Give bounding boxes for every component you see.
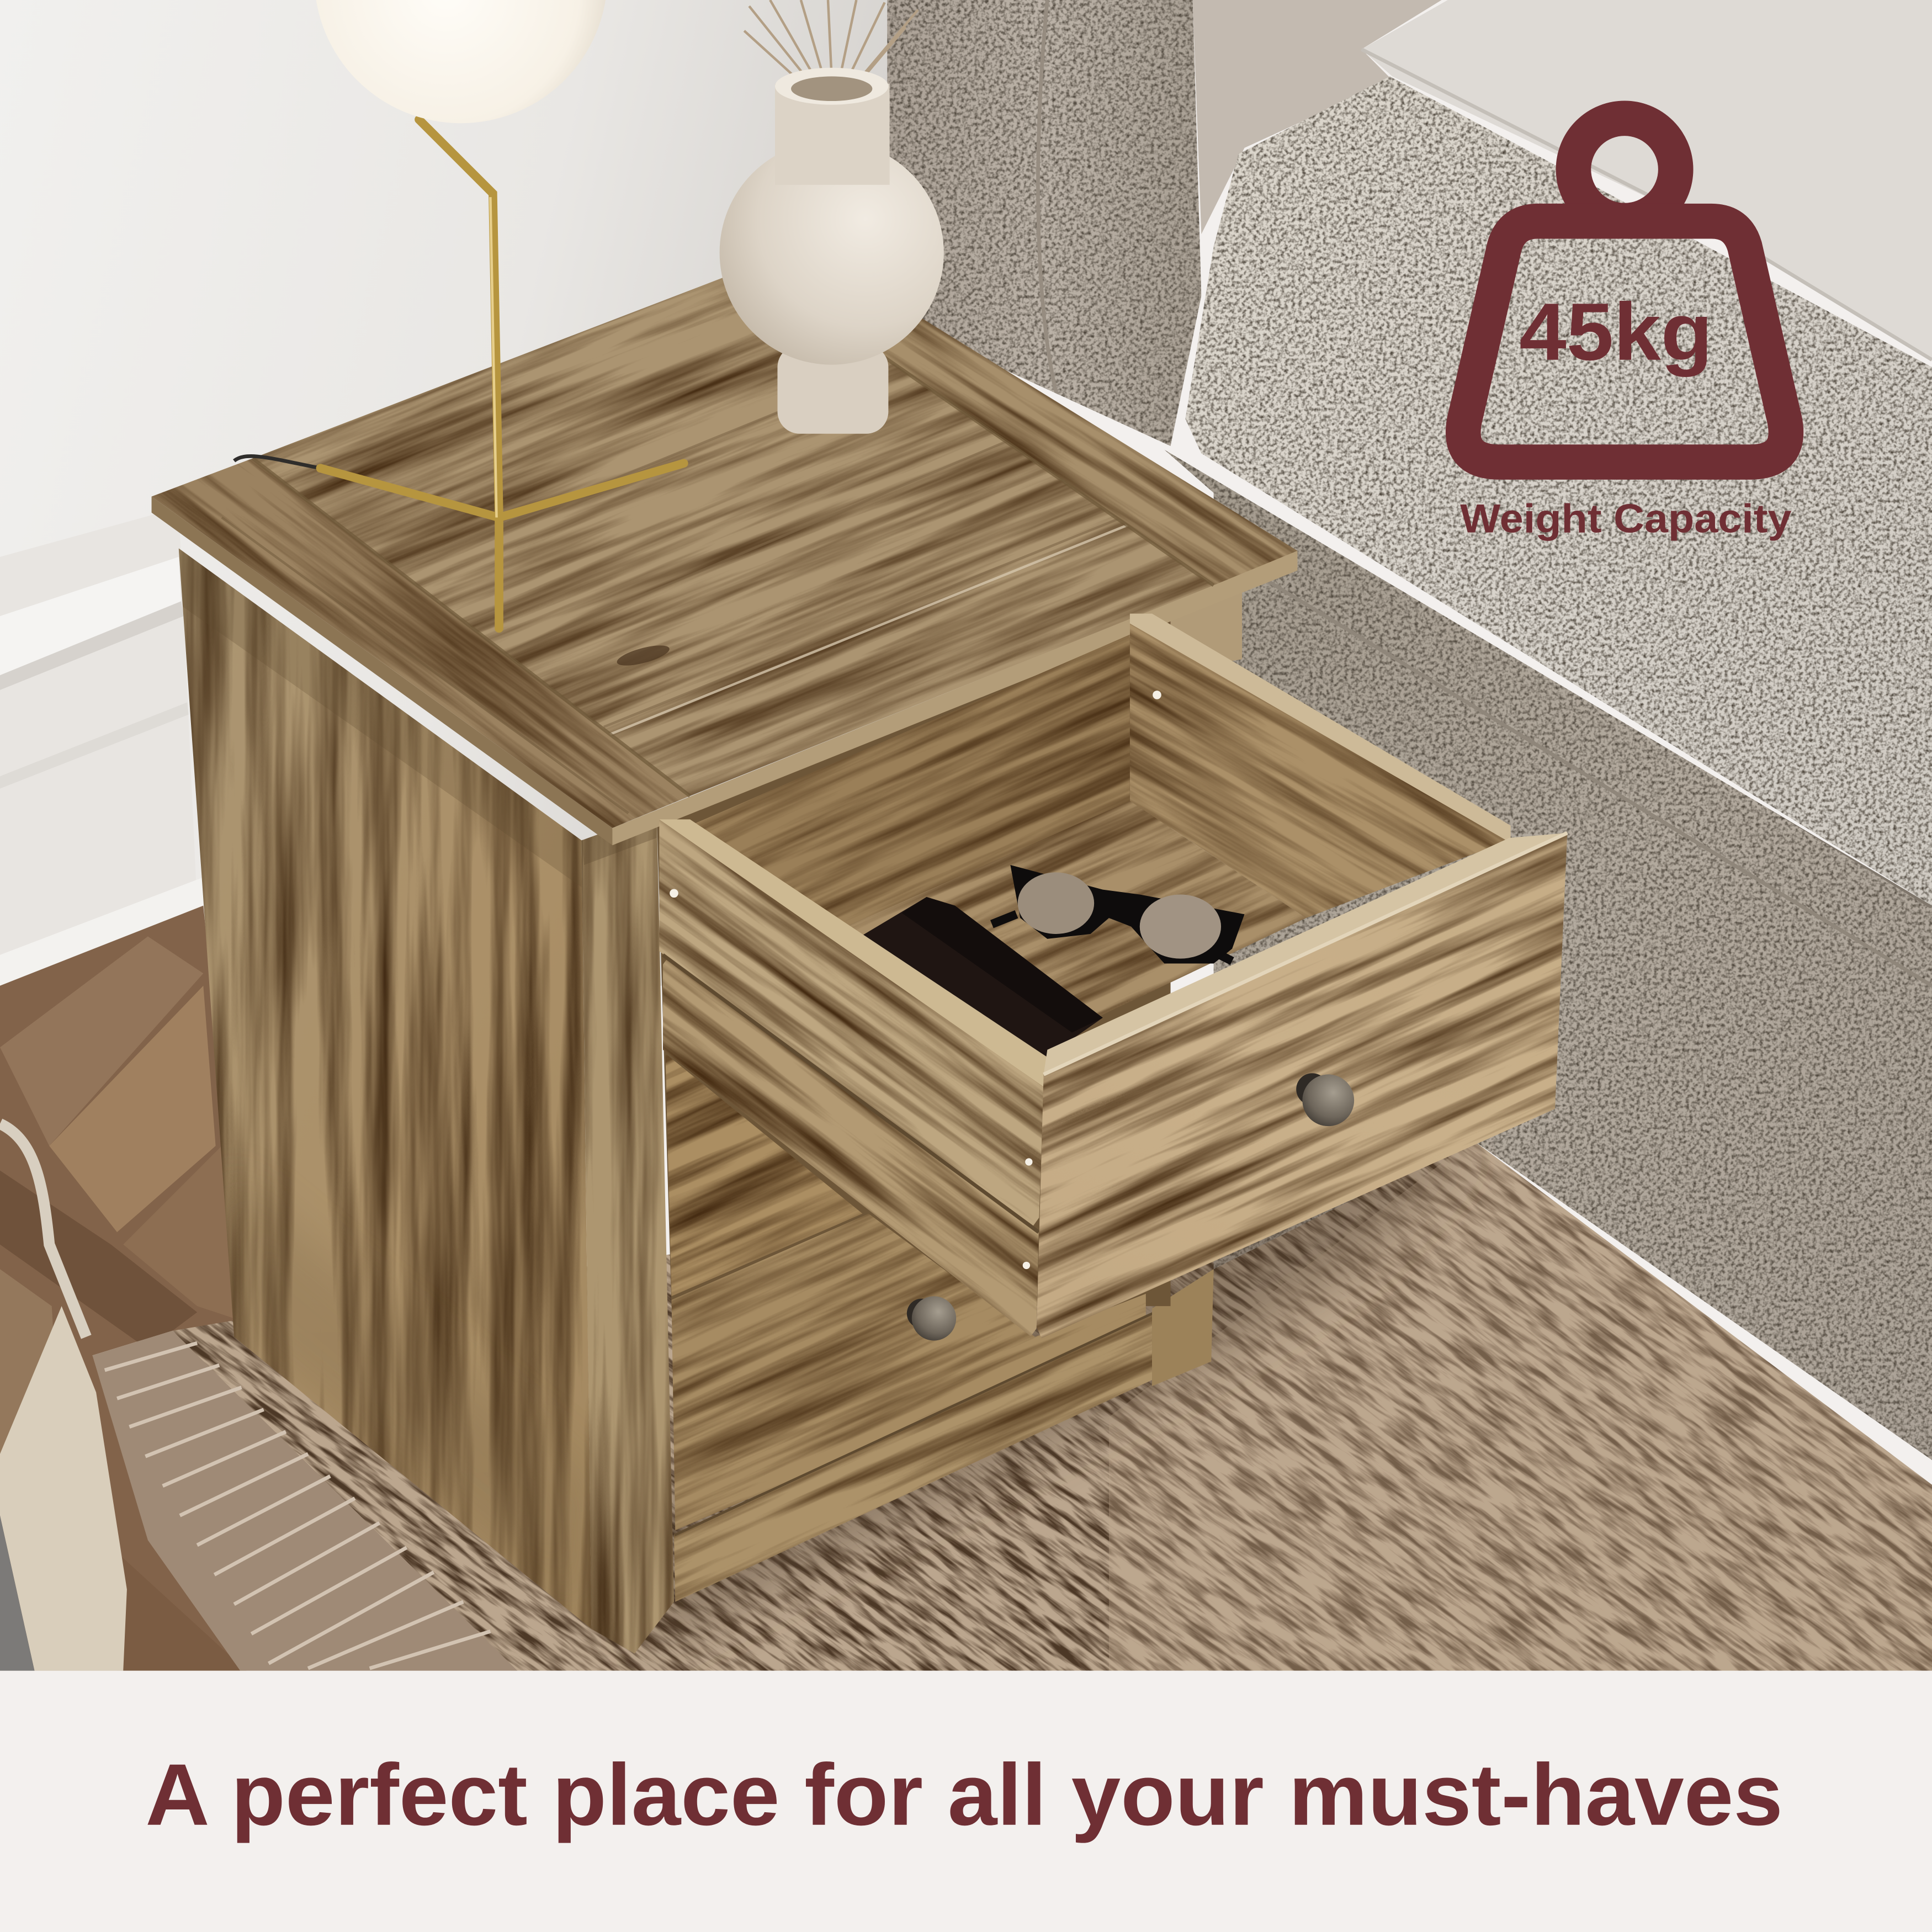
woven basket [0,1124,127,1671]
vase body [777,345,888,434]
lamp cord [234,456,320,468]
lower closed drawer [537,1058,1287,1690]
right strip [717,182,1328,644]
interior right wall [1012,493,1624,1059]
table top [43,0,1435,1129]
open drawer [548,492,1751,1517]
vase with dried flowers [720,0,944,434]
notebook [850,897,1103,1070]
shadow under nightstand [641,1146,1472,1657]
drawer front [861,651,1751,1517]
interior floor [748,662,1396,1186]
table lamp [234,0,684,628]
dark cavity [657,604,1171,1306]
icon: weight [1463,118,1786,462]
drawer side wall [548,742,1153,1291]
front left post [573,807,684,1657]
bottom caption band [0,1671,1932,1932]
left strip [140,378,787,921]
lamp globe [314,0,607,123]
drawer lip [1044,833,1567,1074]
middle drawer face [565,959,992,1393]
dried flowers [744,0,918,105]
weight capacity badge [1460,118,1792,541]
left side panel [172,542,598,1639]
rug fringe [92,1331,518,1671]
weight capacity label: Weight Capacity [1460,495,1792,541]
sofa base [1158,444,1932,1466]
herringbone wooden floor [0,899,259,1676]
glasses [992,865,1244,964]
pillow [1362,0,1932,360]
bottom rail [571,1176,1252,1732]
interior back wall [589,492,1246,1055]
headline: A perfect place for all your must-haves [145,1746,1783,1844]
screws [670,691,1161,1269]
lower drawer knob [907,1296,956,1341]
nightstand [43,0,1751,1732]
sofa seat cushion [1177,68,1932,918]
lamp stem and feet [320,120,684,628]
sofa back cushions [881,0,1442,456]
jute rug [0,402,1932,1932]
wall with skirting board [0,0,936,986]
drawer runner [555,872,1146,1420]
weight value: 45kg [1519,287,1713,378]
upper drawer knob [1296,1073,1354,1126]
rear right post [1152,579,1242,1386]
main top boards [43,0,1435,1129]
